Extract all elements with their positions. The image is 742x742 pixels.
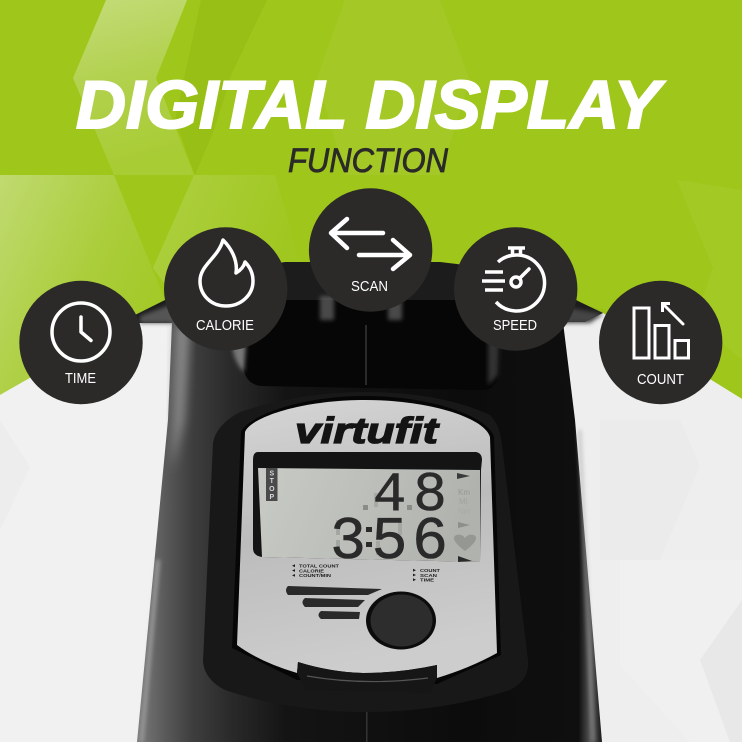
console panel: silver faceplate [232, 396, 501, 693]
LCD unit markers: MI [459, 497, 468, 506]
LCD readout: 3 [330, 509, 366, 577]
STOP indicator: T [270, 478, 275, 485]
badge: calorie [164, 227, 287, 351]
left key legend: CALORIE [299, 568, 325, 574]
LCD unit markers: Nm [458, 507, 471, 516]
LCD readout: 6 [412, 509, 448, 577]
right key legend: SCAN [420, 573, 438, 579]
LCD readout: 8 [413, 463, 447, 527]
right key legend [413, 568, 440, 584]
icon: flame [200, 240, 253, 306]
icon: stopwatch [482, 248, 545, 311]
LCD screen [253, 452, 482, 562]
subtitle: FUNCTION [288, 142, 448, 180]
right key legend: TIME [420, 578, 435, 584]
STOP indicator: S [269, 470, 274, 478]
photo: rowing machine body [135, 262, 603, 742]
badge: scan [309, 188, 432, 312]
left key legend [292, 564, 339, 579]
console bezel [203, 392, 528, 712]
STOP indicator: P [269, 494, 274, 501]
badge: scan: SCAN [351, 279, 388, 295]
console button [366, 592, 436, 650]
icon: opposing arrows [331, 219, 410, 269]
icon: bars with arrow [634, 304, 688, 358]
LCD readout [333, 472, 444, 559]
badge: count [599, 281, 722, 404]
badge: speed [454, 227, 577, 351]
left key legend: COUNT/MIN [299, 573, 332, 579]
right key legend: COUNT [420, 568, 440, 574]
STOP indicator: O [269, 486, 275, 493]
badge: time: TIME [65, 371, 96, 387]
LCD readout: 5 [371, 509, 408, 577]
STOP indicator [266, 468, 278, 501]
badge: count: COUNT [637, 372, 684, 388]
LCD readout: 4 [373, 463, 406, 527]
badge: speed: SPEED [493, 318, 537, 334]
badge: calorie: CALORIE [196, 318, 254, 334]
icon: clock [52, 303, 110, 361]
upper housing [243, 300, 500, 390]
title: DIGITAL DISPLAY [76, 67, 666, 143]
LCD unit markers [454, 473, 476, 562]
left key legend: TOTAL COUNT [299, 564, 339, 570]
LCD unit markers: Km [458, 488, 470, 497]
logo: virtufit: virtufit [295, 410, 441, 451]
speed lines decoration [286, 586, 382, 619]
badge: time [19, 281, 143, 404]
